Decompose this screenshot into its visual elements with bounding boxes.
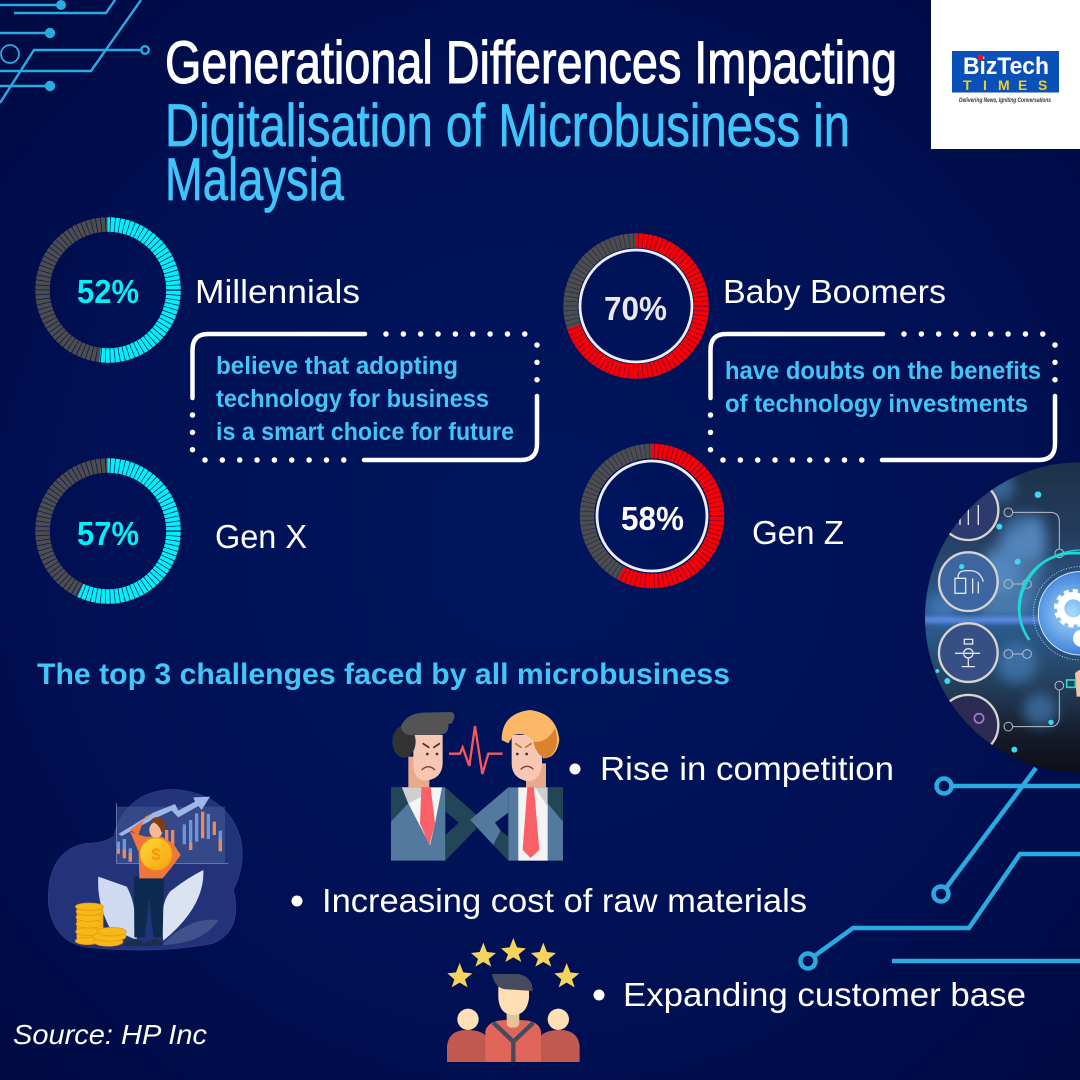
icon: two arguing businessmen: [391, 710, 563, 861]
donut: Millennials 52%: [42, 224, 174, 356]
label: Gen Z: Gen Z: [752, 514, 844, 551]
callout: Baby Boomers statement: [710, 334, 1055, 460]
bullet: increasing cost of raw materials: Increasing cost of raw materials: [322, 882, 807, 919]
bullet: expanding customer base: Expanding customer base: [623, 976, 1026, 1013]
icon: person with coin and rising chart: $: [151, 845, 161, 864]
donut: Millennials 52%: 52%: [77, 273, 139, 310]
title: Malaysia: [165, 146, 344, 213]
donut: Gen Z 58%: [587, 451, 717, 581]
callout: Millennials statement: technology for business: [216, 385, 489, 413]
logo: BizTech Times: Delivering News, Igniting Conversations: [959, 98, 1052, 104]
circuit decoration: top left: [0, 0, 149, 103]
icon: customers with five stars: [447, 938, 580, 1062]
photo: technology gears circle: [920, 460, 1080, 777]
label: Baby Boomers: Baby Boomers: [723, 273, 946, 310]
callout: Baby Boomers statement: of technology investments: [725, 390, 1028, 418]
source note: Source: HP Inc: [13, 1019, 207, 1050]
callout: Millennials statement: believe that adopting: [216, 352, 458, 380]
label: Millennials: Millennials: [195, 273, 360, 310]
logo: BizTech Times: TIMES: [963, 77, 1047, 93]
callout: Millennials statement: is a smart choice for future: [216, 418, 514, 446]
title: Generational Differences Impacting: [165, 29, 897, 96]
donut: Gen X 57%: 57%: [77, 515, 139, 552]
logo: BizTech Times: [931, 0, 1080, 149]
donut: Gen X 57%: [42, 466, 174, 596]
logo: BizTech Times: BizTech: [963, 53, 1049, 80]
heading: top 3 challenges: The top 3 challenges faced by all microbusiness: [37, 658, 730, 691]
donut: Gen Z 58%: 58%: [621, 500, 684, 537]
donut: Baby Boomers 70%: [570, 240, 702, 372]
bullet: rise in competition: Rise in competition: [600, 750, 894, 787]
donut: Baby Boomers 70%: 70%: [604, 290, 667, 327]
title: Digitalisation of Microbusiness in: [165, 92, 850, 159]
circuit decoration: bottom right: [800, 768, 1080, 968]
callout: Baby Boomers statement: have doubts on the benefits: [725, 357, 1041, 385]
title: [165, 29, 897, 213]
icon: person with coin and rising chart: [48, 789, 242, 950]
label: Gen X: Gen X: [215, 518, 307, 555]
callout: Millennials statement: [192, 334, 537, 460]
